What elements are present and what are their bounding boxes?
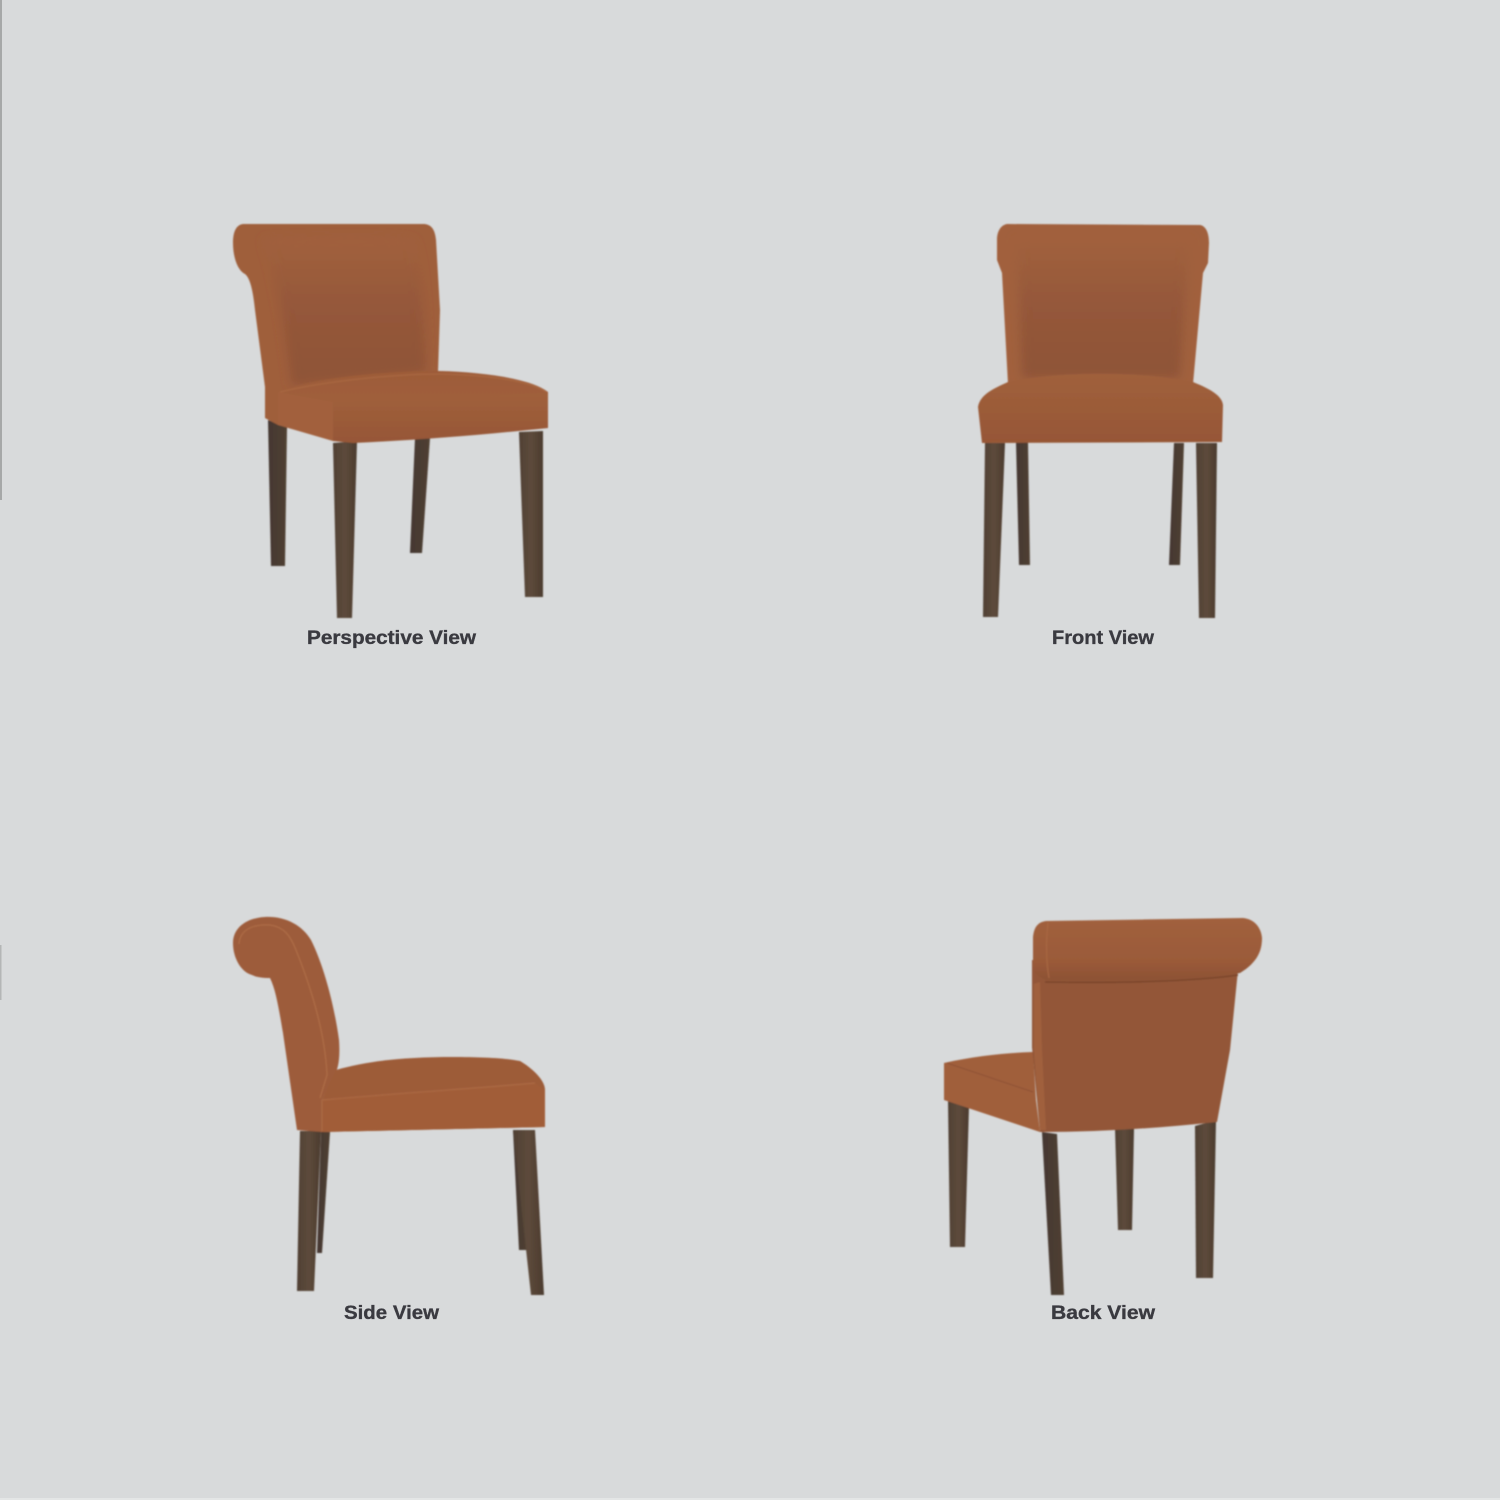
chair top roll, back <box>1033 918 1262 982</box>
label: back view: Back View <box>1051 1303 1155 1324</box>
chair backrest, perspective <box>233 224 440 425</box>
panel: front view chair <box>978 224 1223 618</box>
label: front view: Front View <box>1052 628 1154 649</box>
chair back panel <box>1032 960 1238 1132</box>
chair seat, back <box>944 1052 1040 1132</box>
chair seat, perspective <box>278 371 548 443</box>
chair backrest, front <box>997 224 1209 384</box>
panel: side view chair <box>233 917 545 1295</box>
chair legs, back <box>948 1100 1216 1295</box>
chair seat, front <box>978 374 1223 443</box>
panel: back view chair <box>944 918 1262 1295</box>
chair legs, front <box>983 442 1217 618</box>
chair seat, side <box>322 1057 545 1132</box>
chair legs, perspective <box>268 420 543 618</box>
chair legs, side <box>297 1130 544 1295</box>
panel: perspective view chair <box>233 224 548 618</box>
label: side view: Side View <box>344 1303 439 1324</box>
label: perspective view: Perspective View <box>307 628 476 649</box>
chair backrest, side <box>233 917 339 1132</box>
